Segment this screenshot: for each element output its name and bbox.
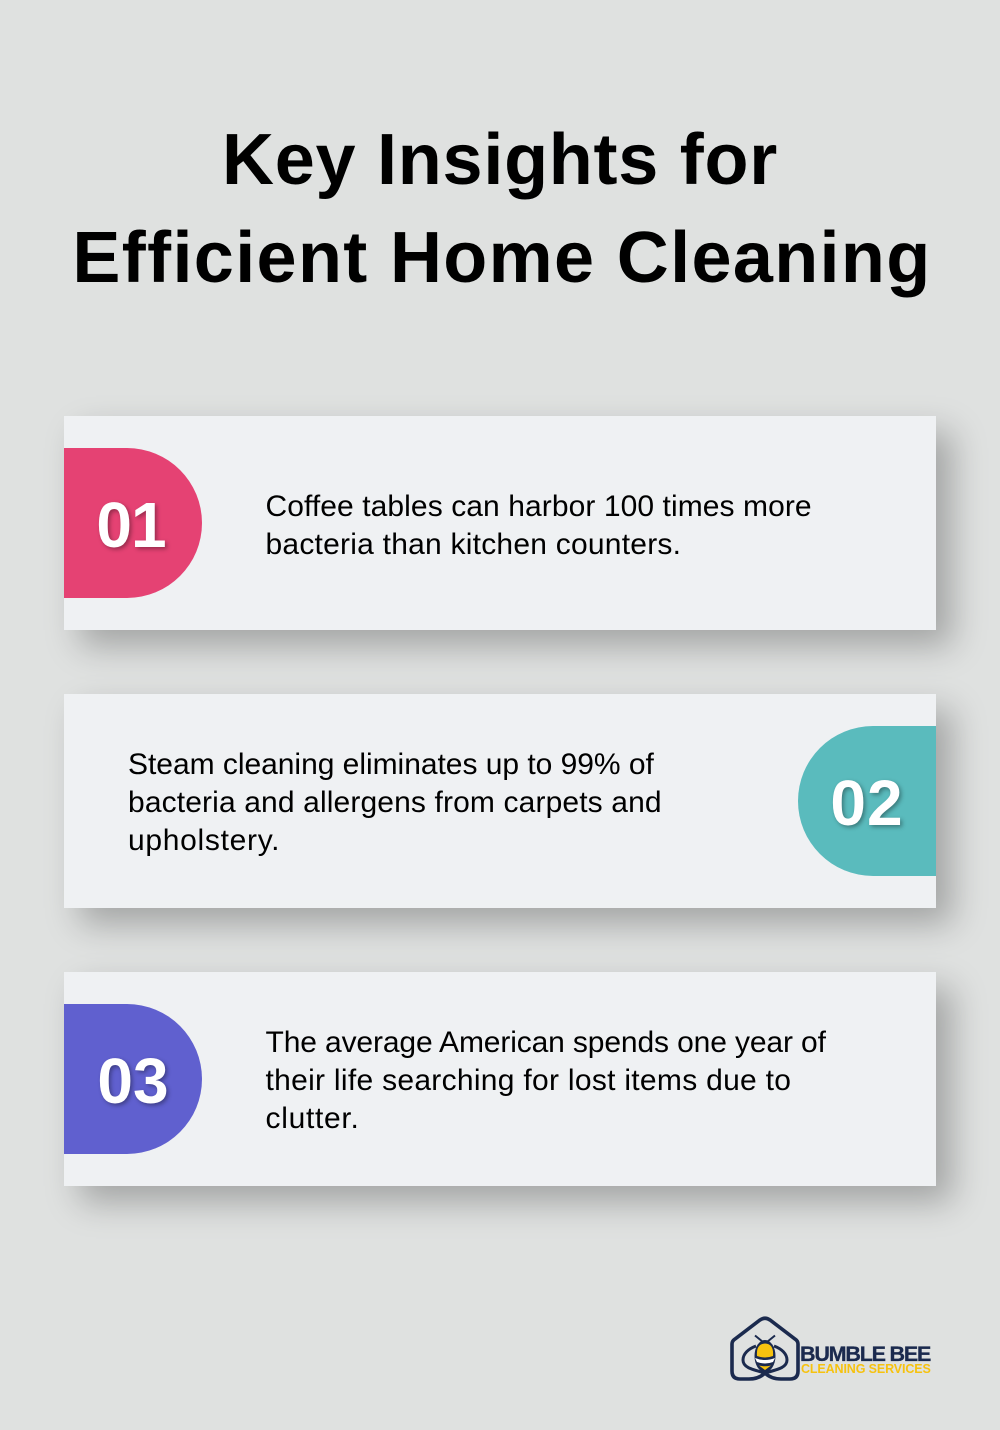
text: average american: clutter.	[266, 1102, 359, 1135]
text: coffee tables: bacteria than kitchen counters.	[266, 528, 681, 561]
badge: 03	[64, 1004, 202, 1154]
text: average american: The average American spends one year of	[266, 1026, 826, 1059]
text: coffee tables	[266, 490, 812, 561]
panel: insight 02	[64, 694, 936, 908]
text: steam cleaning	[128, 748, 662, 857]
badge: 03: 03	[97, 1045, 169, 1117]
text: average american	[266, 1026, 826, 1135]
badge: 02: 02	[830, 767, 904, 839]
text: steam cleaning: Steam cleaning eliminates up to 99% of	[128, 748, 654, 781]
text: steam cleaning: upholstery.	[128, 824, 280, 857]
badge: 01	[64, 448, 202, 598]
title	[72, 120, 932, 298]
wordmark: BUMBLE BEE	[800, 1342, 930, 1366]
logo: bumble bee cleaning services	[730, 1316, 931, 1381]
text: steam cleaning: bacteria and allergens from carpets and	[128, 786, 662, 819]
text: average american: their life searching for lost items due to	[266, 1064, 791, 1097]
badge: 02	[798, 726, 936, 876]
tagline: CLEANING SERVICES	[801, 1362, 931, 1376]
icon: bee in house	[730, 1316, 800, 1381]
text: coffee tables: Coffee tables can harbor 100 times more	[266, 490, 812, 523]
badge: 01: 01	[96, 489, 166, 561]
title: Key Insights for	[222, 120, 778, 200]
panel: insight 03	[64, 972, 936, 1186]
panel: insight 01	[64, 416, 936, 630]
title: Efficient Home Cleaning	[72, 218, 932, 298]
